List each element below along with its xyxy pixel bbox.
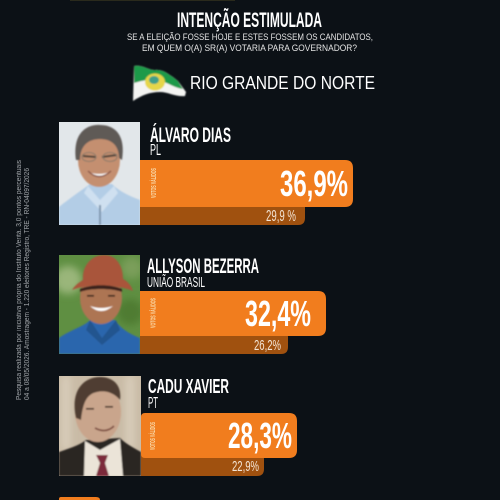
name: CADU XAVIER bbox=[148, 375, 229, 398]
bar label: VOTOS VÁLIDOS bbox=[148, 298, 158, 328]
secondary bar bbox=[140, 200, 305, 225]
name: ÁLVARO DIAS bbox=[150, 124, 231, 147]
next panel bar (cut off) bbox=[59, 497, 100, 500]
photo: Cadu Xavier bbox=[59, 376, 141, 476]
photo: Álvaro Dias bbox=[59, 122, 140, 225]
methodology note: Pesquisa realizada por iniciativa própria do Instituto Veritá. 3,0 pontos percentuais bbox=[16, 160, 23, 400]
secondary value: 22,9% bbox=[232, 458, 259, 475]
title: INTENÇÃO ESTIMULADA bbox=[177, 9, 322, 32]
main value: 36,9% bbox=[280, 163, 348, 204]
main bar bbox=[141, 413, 297, 458]
subtitle question bbox=[127, 32, 373, 54]
panel: Allyson Bezerra bbox=[54, 255, 326, 354]
main bar bbox=[140, 160, 353, 207]
methodology note bbox=[16, 160, 31, 400]
panel: Álvaro Dias bbox=[59, 122, 353, 225]
panel: Cadu Xavier: VOTOS VÁLIDOS bbox=[148, 422, 157, 450]
photo: Allyson Bezerra bbox=[54, 255, 143, 354]
main value: 28,3% bbox=[228, 415, 292, 456]
main bar bbox=[140, 291, 326, 336]
bar label: VOTOS VÁLIDOS bbox=[149, 168, 158, 198]
secondary bar bbox=[140, 330, 288, 354]
state name: RIO GRANDE DO NORTE bbox=[190, 73, 375, 93]
icon: Rio Grande do Norte flag bbox=[133, 66, 186, 101]
main value: 32,4% bbox=[245, 293, 311, 334]
methodology note: 04 a 08/05/2026. Amostragem - 1.220 eleitores Registro, TRE - RN-04097/2026 bbox=[24, 168, 31, 400]
secondary value: 26,2% bbox=[254, 337, 281, 354]
secondary value: 29,9 % bbox=[266, 208, 296, 225]
panel: Cadu Xavier bbox=[59, 375, 297, 476]
secondary bar bbox=[141, 452, 264, 476]
party: PL bbox=[150, 142, 161, 159]
party: UNIÃO BRASIL bbox=[147, 274, 205, 291]
subtitle question: SE A ELEIÇÃO FOSSE HOJE E ESTES FOSSEM OS CANDIDATOS, bbox=[127, 32, 373, 43]
subtitle question: EM QUEM O(A) SR(A) VOTARIA PARA GOVERNADOR? bbox=[142, 43, 357, 54]
name: ALLYSON BEZERRA bbox=[147, 255, 259, 278]
party: PT bbox=[148, 395, 158, 412]
